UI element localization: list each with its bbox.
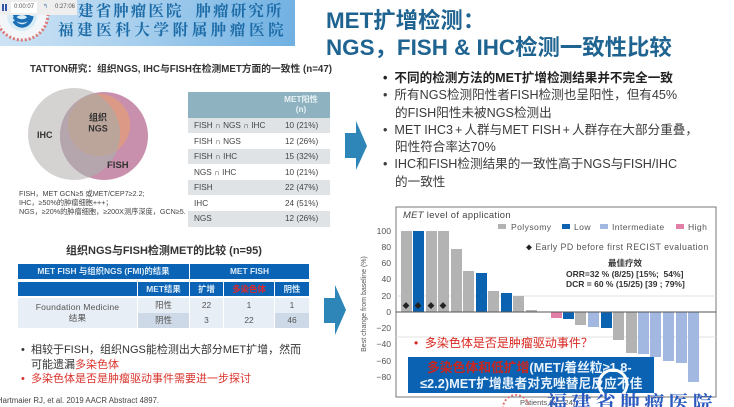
row 2 <box>194 137 318 146</box>
chart legend title: MET level of application <box>403 209 511 220</box>
bars <box>401 231 699 382</box>
citation: Hartmaier RJ, et al. 2019 AACR Abstract 4897. <box>0 396 159 405</box>
row 3: FISH ∩ IHC <box>194 152 237 161</box>
row label: Foundation Medicine <box>18 298 137 328</box>
header row 1 <box>18 264 189 279</box>
criteria notes: FISH，MET GCN≥5 或MET/CEP7≥2.2; <box>19 189 145 198</box>
positive row: 阳性 <box>155 300 172 310</box>
row 7: 12 (26%) <box>285 214 318 223</box>
legend: early PD: ◆ Early PD before first RECIST evaluation <box>526 242 709 252</box>
table: NGS vs FISH: 3 <box>204 315 209 325</box>
right bullet list: 的一致性 <box>395 175 445 189</box>
positive row <box>138 298 189 313</box>
criteria notes: NGS，≥20%的肿瘤细胞，≥200X测序深度，GCN≥5. <box>19 207 186 216</box>
row 3: 15 (32%) <box>285 152 318 161</box>
response rates <box>566 258 685 289</box>
table: NGS vs FISH: 1 <box>290 300 294 310</box>
table: NGS vs FISH: 22 <box>244 315 254 325</box>
y axis labels: 0 <box>386 307 391 317</box>
venn diagram <box>28 88 148 180</box>
row 1: 10 (21%) <box>285 121 318 130</box>
table: NGS vs FISH: 多染色体 <box>232 284 266 294</box>
y axis labels: −80 <box>376 372 391 382</box>
early PD markers: ◆ <box>440 302 446 310</box>
row 5: FISH <box>194 183 213 192</box>
y axis labels <box>376 226 391 382</box>
y axis labels: −20 <box>376 323 391 333</box>
early PD markers <box>402 302 446 310</box>
waterfall chart <box>360 206 717 407</box>
heading: TATTON study: TATTON研究：组织NGS, IHC与FISH在检测MET方面的一致性 (n=47) <box>30 64 332 75</box>
row 7 <box>188 211 330 227</box>
y axis labels: 20 <box>381 291 391 301</box>
table: NGS vs FISH: 扩增 <box>198 284 215 294</box>
row 6: IHC <box>194 199 208 208</box>
negative row: 阴性 <box>155 315 172 325</box>
criteria notes: IHC，≥50%的肿瘤细胞+++； <box>19 198 113 207</box>
left bullet list: 可能遗漏多染色体 <box>31 359 119 371</box>
row 7: NGS <box>194 214 212 223</box>
title: MET扩增检测： <box>326 8 485 33</box>
row 3 <box>188 149 330 164</box>
table: MET positive counts: MET阳性 <box>284 95 318 104</box>
elapsed time <box>11 2 37 13</box>
icon: pause <box>2 4 7 11</box>
watermark logo <box>503 370 627 407</box>
early PD markers: ◆ <box>402 302 410 310</box>
title: NGS，FISH & IHC检测一致性比较 <box>326 35 672 60</box>
table header <box>188 92 330 118</box>
table: NGS vs FISH <box>18 264 309 329</box>
legend: Intermediate <box>612 222 665 232</box>
criteria notes <box>19 189 186 216</box>
label: IHC: IHC <box>37 130 53 140</box>
y axis labels: 40 <box>381 274 391 284</box>
header row 1: MET FISH 与组织NGS (FMI)的结果 <box>37 266 170 276</box>
y axis labels: 60 <box>381 258 391 268</box>
y axis title: Best change from baseline (%) <box>361 256 368 352</box>
table: NGS vs FISH: MET FISH <box>230 266 269 276</box>
table: NGS vs FISH: 46 <box>287 315 297 325</box>
callout <box>408 357 654 393</box>
legend <box>498 222 707 232</box>
remaining time: 0:27:06 <box>55 4 75 10</box>
row label: Foundation Medicine: 结果 <box>69 313 86 323</box>
early PD markers: ◆ <box>428 302 434 310</box>
video player overlay <box>0 0 77 15</box>
row 1: FISH ∩ NGS ∩ IHC <box>194 121 265 130</box>
right bullet list <box>383 71 698 189</box>
header row 2 <box>18 282 137 296</box>
callout: ≤2.2)MET扩增患者对克唑替尼反应不佳 <box>420 376 643 391</box>
row 6 <box>194 199 318 208</box>
row 5: 22 (47%) <box>285 183 318 192</box>
row 5 <box>188 180 330 195</box>
right bullet list: • 不同的检测方法的MET扩增检测结果并不完全一致 <box>383 71 673 85</box>
row 2: 12 (26%) <box>285 137 318 146</box>
red question: • 多染色体是否是肿瘤驱动事件？ <box>414 335 593 350</box>
right bullet list: • 所有NGS检测阳性者FISH检测也呈阳性，但有45% <box>383 88 677 102</box>
early PD markers: ◆ <box>414 302 422 310</box>
table: NGS vs FISH: MET结果 <box>146 284 181 294</box>
rewind icon: ↰ <box>43 4 48 10</box>
response rates: ORR=32 % (8/25) [15%; 54%] <box>566 269 684 279</box>
left bullet list <box>21 344 301 385</box>
arrow: lower <box>324 285 346 335</box>
label: NGS: 组织 <box>89 112 107 122</box>
row label: Foundation Medicine: Foundation Medicine <box>36 302 119 312</box>
y axis labels: −60 <box>376 356 391 366</box>
response rates: 最佳疗效 <box>608 258 642 268</box>
y axis labels: 80 <box>381 242 391 252</box>
banner <box>0 0 295 46</box>
row 4: 10 (21%) <box>285 168 318 177</box>
row 1 <box>188 118 330 133</box>
left bullet list: • 多染色体是否是肿瘤驱动事件需要进一步探讨 <box>21 373 251 385</box>
row 4: NGS ∩ IHC <box>194 168 236 177</box>
table: MET positive counts <box>188 92 330 227</box>
table: NGS vs FISH: 1 <box>247 300 251 310</box>
label: NGS: NGS <box>88 124 108 134</box>
table: NGS vs FISH: 阴性 <box>284 284 300 294</box>
heading: NGS vs FISH: 组织NGS与FISH检测MET的比较 (n=95) <box>66 245 262 257</box>
negative row <box>138 313 189 328</box>
legend: Polysomy <box>511 222 552 232</box>
icon: hospital logo <box>0 15 50 42</box>
x axis label: Patients (n = 24) <box>520 398 576 407</box>
arrow: upper <box>345 121 367 170</box>
row 6: 24 (51%) <box>285 199 318 208</box>
right bullet list: 的FISH阳性未被NGS检测出 <box>395 106 552 120</box>
right bullet list: • MET IHC3+人群与MET FISH+人群存在大部分重叠， <box>383 123 698 137</box>
y axis labels: 100 <box>377 226 391 236</box>
legend: High <box>688 222 707 232</box>
table: NGS vs FISH: 22 <box>202 300 211 310</box>
right bullet list: 阳性符合率达70% <box>395 140 496 154</box>
row 2: FISH ∩ NGS <box>194 137 241 146</box>
row 4 <box>194 168 318 177</box>
y axis labels: −40 <box>376 339 391 349</box>
banner text line 2: 福建医科大学附属肿瘤医院 <box>58 18 287 40</box>
callout: 多染色体和低扩增(MET/着丝粒≥1.8- <box>427 360 632 375</box>
elapsed time: 0:00:07 <box>14 4 34 10</box>
legend: Low <box>574 222 591 232</box>
response rates: DCR = 60 % (15/25) [39 ; 79%] <box>566 279 685 289</box>
table: MET positive counts: (n) <box>296 105 306 114</box>
right bullet list: • IHC和FISH检测结果的一致性高于NGS与FISH/IHC <box>383 157 677 171</box>
left bullet list: • 相较于FISH，组织NGS能检测出大部分MET扩增，然而 <box>21 344 301 356</box>
title <box>326 8 672 60</box>
label: FISH: FISH <box>107 160 129 171</box>
